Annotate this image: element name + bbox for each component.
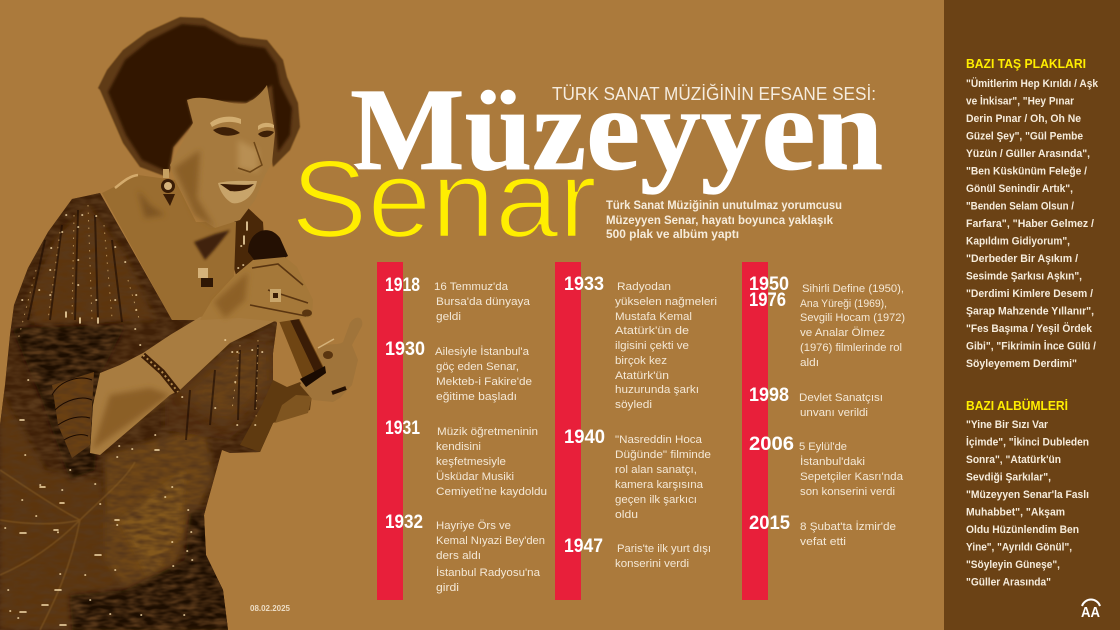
sidebar background [944, 0, 1120, 630]
event 1930: Mekteb-i Fakire'de [436, 376, 532, 388]
event 1931: keşfetmesiyle [436, 456, 506, 468]
event 1950 / 1976: Sevgili Hocam (1972) [800, 312, 905, 324]
list: stone records: "Ümitlerim Hep Kırıldı / Aşk [966, 77, 1099, 90]
event 1933: 1933 [564, 274, 604, 295]
event 1931: Üsküdar Musiki [436, 471, 514, 483]
event 1930: eğitime başladı [436, 391, 517, 403]
sequins [5, 215, 262, 625]
timeline bar 1 [377, 262, 403, 600]
event 1930: göç eden Senar, [436, 361, 519, 373]
event 1940: geçen ilk şarkıcı [615, 494, 697, 506]
face [170, 85, 275, 228]
subtitle: TÜRK SANAT MÜZİĞİNİN EFSANE SESİ: [552, 83, 876, 104]
list: albums: "Yine Bir Sızı Var [966, 419, 1048, 431]
timeline bar 2 [555, 262, 581, 600]
event 1931: Cemiyeti'ne kaydoldu [436, 486, 547, 498]
event 2006: son konserini verdi [800, 486, 895, 498]
event 1950 / 1976: (1976) filmlerinde rol [800, 342, 902, 354]
list: albums: Oldu Hüzünlendim Ben [966, 524, 1079, 536]
event 1998: Devlet Sanatçısı [799, 392, 883, 404]
hand holding microphone [200, 257, 313, 322]
list: stone records: Derin Pınar / Oh, Oh Ne [966, 113, 1081, 125]
event 1933: Radyodan [617, 281, 671, 293]
list: stone records: Şarap Mahzende Yıllanır", [966, 306, 1094, 318]
title: Senar: Senar [291, 138, 597, 261]
event 1931: Müzik öğretmeninin [437, 426, 538, 438]
list: stone records: "Benden Selam Olsun / [966, 200, 1075, 212]
event 1940: rol alan sanatçı, [615, 464, 697, 476]
list: albums: "Güller Arasında" [966, 576, 1051, 588]
list: stone records: Farfara", "Haber Gelmez / [966, 218, 1095, 230]
event 1933: Atatürk'ün de [615, 325, 689, 337]
raised hand [300, 318, 362, 402]
eyes and brows [210, 117, 274, 172]
microphone [248, 230, 326, 387]
event 1950 / 1976: ve Analar Ölmez [800, 327, 885, 339]
event 1933 [564, 274, 717, 411]
list: stone records: Sesimde Şarkısı Aşkın", [966, 270, 1082, 282]
list: stone records: Kapıldım Gidiyorum", [966, 236, 1070, 248]
list: albums: "Müzeyyen Senar'la Faslı [966, 489, 1089, 501]
event 1950 / 1976: 1950 [749, 274, 789, 295]
event 1918: 1918 [385, 275, 420, 296]
event 1940: kamera karşısına [615, 479, 704, 491]
bracelet [143, 355, 178, 392]
list: stone records [966, 77, 1099, 370]
dress strap by microphone [233, 208, 266, 288]
event 1930 [385, 339, 532, 403]
dress [0, 193, 277, 630]
event 1947 [564, 536, 711, 570]
list: stone records: Güzel Şey", "Gül Pembe [966, 130, 1083, 142]
hair [98, 17, 300, 177]
event 1930: Ailesiyle İstanbul'a [435, 345, 530, 358]
event 1931: kendisini [436, 441, 481, 453]
holding arm [90, 310, 277, 455]
list: albums: Muhabbet", "Akşam [966, 506, 1065, 518]
list: stone records: "Ben Küskünüm Feleğe / [966, 166, 1088, 178]
event 1998: 1998 [749, 385, 789, 406]
event 1940: 1940 [564, 427, 605, 448]
event 1950 / 1976: 1976 [749, 290, 786, 311]
event 1931 [385, 418, 547, 498]
intro paragraph: Türk Sanat Müziğinin unutulmaz yorumcusu [606, 198, 842, 212]
event 1950 / 1976 [749, 274, 905, 369]
event 1998 [749, 385, 883, 419]
event 1940: oldu [615, 509, 638, 521]
event 1932: Kemal Nıyazi Bey'den [436, 535, 545, 547]
event 1932: ders aldı [436, 550, 481, 562]
event 1940: "Nasreddin Hoca [615, 434, 703, 446]
event 1932 [385, 512, 545, 594]
list: stone records: ve İnkisar", "Hey Pınar [966, 94, 1074, 108]
event 1918: geldi [436, 311, 461, 323]
heading: albums: BAZI ALBÜMLERİ [966, 398, 1068, 413]
list: albums: "Söyleyin Güneşe", [966, 559, 1060, 571]
event 1933: Atatürk'ün [615, 370, 669, 382]
event 1932: girdi [436, 582, 459, 594]
list: stone records: Gönül Senindir Artık", [966, 183, 1073, 195]
list: stone records: Yüzün / Güller Arasında", [966, 148, 1090, 160]
event 1940 [564, 427, 711, 521]
event 1932: 1932 [385, 512, 423, 533]
photo: Müzeyyen Senar singing [0, 17, 362, 630]
list: stone records: Söyleyemem Derdimi" [966, 358, 1077, 370]
timeline bar 3 [742, 262, 768, 600]
event 1998: unvanı verildi [800, 407, 868, 419]
event 1932: Hayriye Örs ve [436, 520, 511, 532]
event 2015 [749, 513, 896, 548]
event 2006: 2006 [749, 434, 794, 455]
event 2006: Sepetçiler Kasrı'nda [800, 471, 904, 483]
intro paragraph [606, 198, 842, 241]
event 1933: söyledi [615, 399, 652, 411]
earring [161, 169, 175, 206]
event 1933: ilgisini çekti ve [615, 340, 689, 352]
event 1918: Bursa'da dünyaya [436, 296, 531, 308]
panel: timeline columns [377, 262, 905, 600]
event 1947: Paris'te ilk yurt dışı [617, 543, 711, 555]
panel: sidebar [944, 0, 1120, 630]
event 1918: 16 Temmuz'da [434, 281, 509, 293]
chest and neck [102, 175, 238, 320]
event 2015: vefat etti [800, 536, 846, 548]
event 1940: Düğünde" filminde [615, 449, 711, 461]
event 1918 [385, 275, 531, 323]
raised forearm [240, 380, 312, 452]
list: stone records: "Derbeder Bir Aşıkım / [966, 253, 1079, 265]
event 2015: 8 Şubat'ta İzmir'de [800, 520, 896, 533]
event 2006: İstanbul'daki [800, 455, 865, 468]
event 1947: konserini verdi [615, 558, 689, 570]
intro paragraph: Müzeyyen Senar, hayatı boyunca yaklaşık [606, 213, 833, 227]
title: Müzeyyen: Müzeyyen [350, 64, 883, 195]
event 1947: 1947 [564, 536, 603, 557]
event 1933: birçok kez [615, 355, 667, 367]
mouth [218, 181, 257, 203]
event 1933: yükselen nağmeleri [615, 296, 717, 308]
event 1933: huzurunda şarkı [615, 384, 699, 396]
event 1950 / 1976: aldı [800, 357, 819, 369]
intro paragraph: 500 plak ve albüm yaptı [606, 227, 739, 241]
list: albums: Yine", "Ayrıldı Gönül", [966, 542, 1072, 554]
event 1933: Mustafa Kemal [615, 311, 692, 323]
list: albums [966, 419, 1089, 588]
list: stone records: Gibi", "Fikrimin İnce Gülü / [966, 340, 1097, 352]
heading: stone records: BAZI TAŞ PLAKLARI [966, 56, 1086, 71]
date: 08.02.2025 [250, 604, 291, 613]
list: stone records: "Fes Başıma / Yeşil Ördek [966, 322, 1093, 335]
list: albums: Sonra", "Atatürk'ün [966, 454, 1061, 466]
list: albums: İçimde", "İkinci Dubleden [966, 436, 1089, 448]
event 2006: 5 Eylül'de [799, 441, 847, 453]
event 1931: 1931 [385, 418, 420, 439]
list: stone records: "Derdimi Kimlere Desem / [966, 288, 1094, 300]
list: albums: Sevdiği Şarkılar", [966, 472, 1051, 484]
event 1932: İstanbul Radyosu'na [436, 566, 541, 579]
event 2006 [749, 434, 904, 498]
event 2015: 2015 [749, 513, 790, 534]
event 1950 / 1976: Ana Yüreği (1969), [800, 298, 887, 310]
event 1930: 1930 [385, 339, 425, 360]
event 1950 / 1976: Sihirli Define (1950), [802, 283, 904, 295]
icon: AA logo: AA [1081, 604, 1100, 621]
